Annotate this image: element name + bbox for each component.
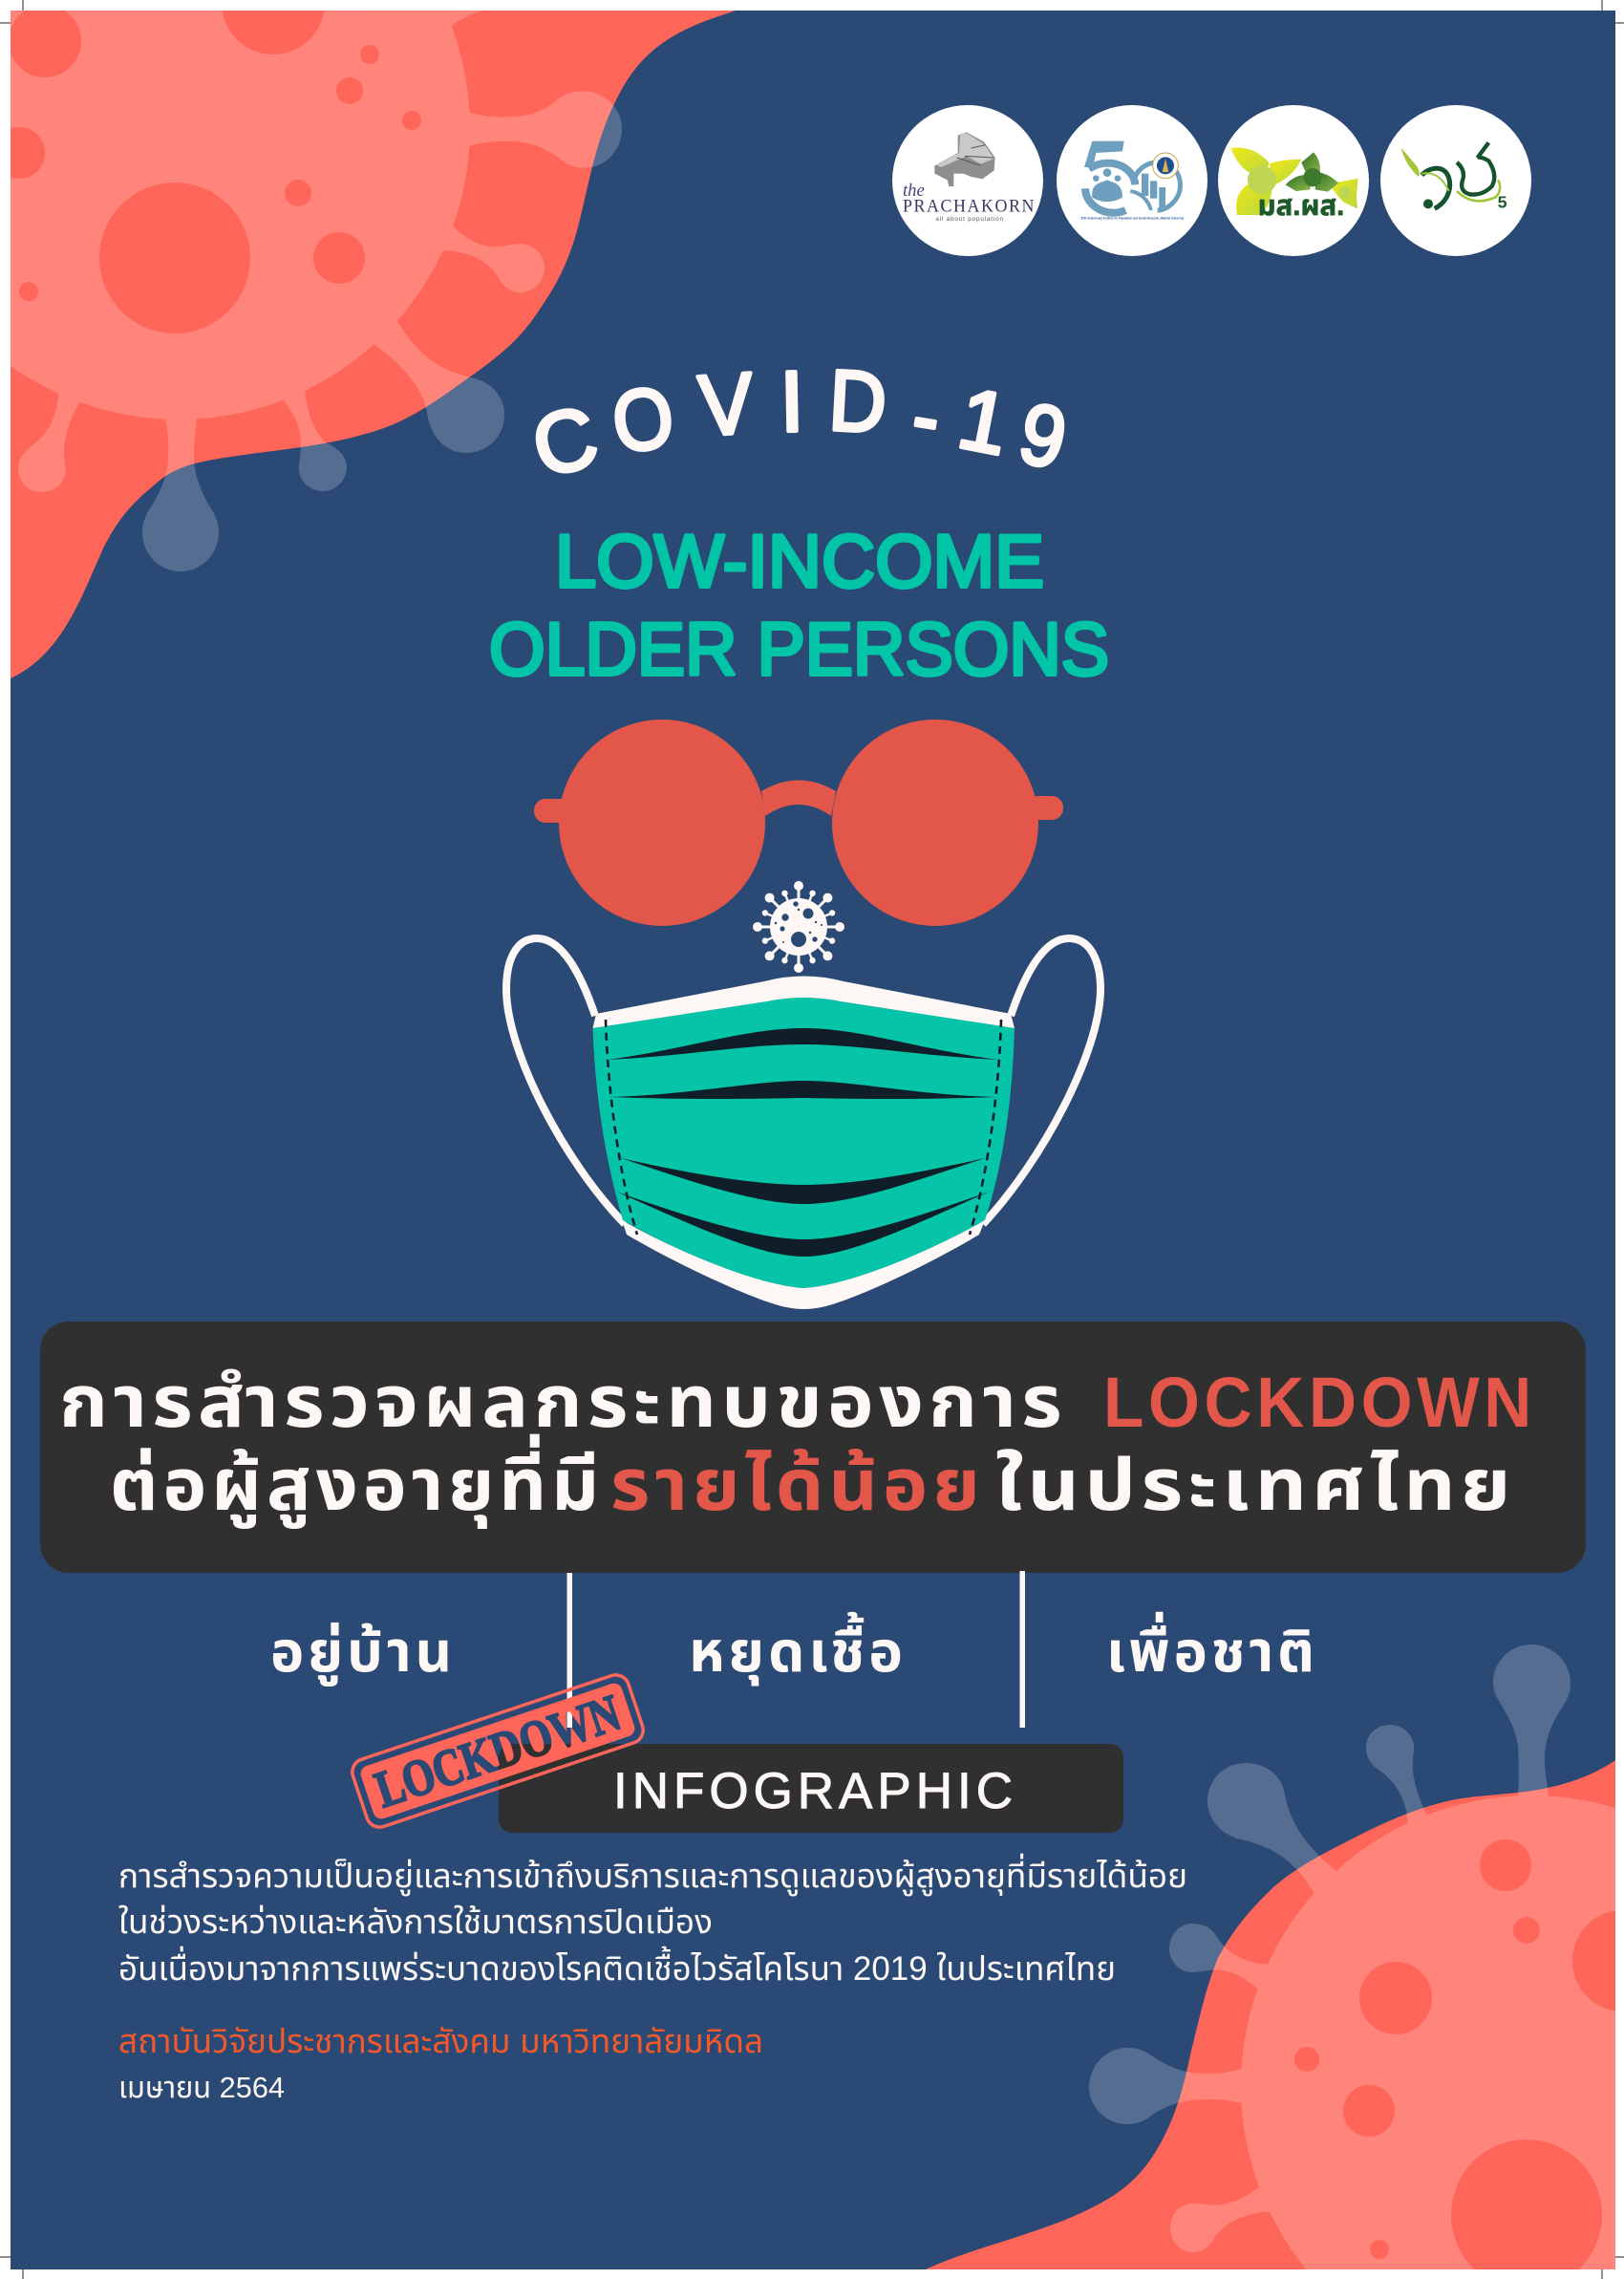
title: COVID-19 arched letters: 9 bbox=[1012, 385, 1075, 487]
icon: grey P building bbox=[934, 132, 995, 186]
main title text bbox=[59, 1362, 1536, 1529]
slogan: หยุดเชื้อ bbox=[689, 1611, 907, 1687]
lockdown stamp bbox=[349, 1671, 647, 1831]
bottom-right virus blob bbox=[926, 1645, 1624, 2279]
tagline: all about population bbox=[935, 216, 1003, 223]
title: COVID-19 arched letters: I bbox=[780, 355, 804, 450]
body description: อันเนื่องมาจากการแพร่ระบาดของโรคติดเชื้อไวรัสโคโรนา 2019 ในประเทศไทย bbox=[118, 1946, 1116, 1988]
main title text: ต่อผู้สูงอายุที่มี bbox=[110, 1434, 604, 1529]
infographic text: INFOGRAPHIC bbox=[613, 1763, 1013, 1819]
panel: main title box bbox=[40, 1322, 1586, 1573]
university seal bbox=[1153, 153, 1178, 179]
top white band bbox=[592, 977, 1015, 1028]
coral blob shape bbox=[11, 11, 736, 678]
mask body bbox=[592, 998, 1015, 1288]
panel: infographic label bbox=[499, 1744, 1123, 1833]
main title text: การสำรวจผลกระทบของการ bbox=[59, 1362, 1067, 1443]
body description bbox=[118, 1853, 1187, 1988]
logo text: มส.ผส. bbox=[1258, 190, 1344, 222]
title: COVID-19 arched letters: D bbox=[826, 353, 888, 451]
title: COVID-19 arched letters: V bbox=[695, 355, 757, 454]
logo: 60 swirl bbox=[1380, 105, 1531, 256]
ring and bars bbox=[1130, 162, 1180, 210]
icon: red round glasses bbox=[534, 720, 1063, 926]
pleats bbox=[608, 1028, 998, 1257]
title: COVID-19 arched letters bbox=[524, 353, 1075, 496]
top-left virus blob bbox=[0, 0, 736, 678]
logo: Prachakorn bbox=[892, 105, 1043, 256]
slogan: อยู่บ้าน bbox=[270, 1620, 456, 1687]
numeral five with people bbox=[1084, 141, 1135, 213]
yellow leaves bbox=[1230, 147, 1358, 215]
title: COVID-19 arched letters: 1 bbox=[951, 371, 1016, 474]
divider lines bbox=[567, 1571, 1025, 1728]
swirl strokes bbox=[1401, 142, 1500, 208]
title: COVID-19 arched letters: O bbox=[608, 369, 679, 471]
title: COVID-19 arched letters: C bbox=[524, 389, 607, 496]
main title text: ในประเทศไทย bbox=[995, 1445, 1516, 1526]
dot bbox=[1423, 199, 1433, 208]
anniversary caption: 50th Anniversary Institute for Population and Social Research, Mahidol University bbox=[1081, 216, 1185, 220]
heading: low-income older persons: OLDER PERSONS bbox=[489, 607, 1109, 691]
logo: 50th anniversary bbox=[1057, 105, 1207, 256]
leaf centres bbox=[1248, 165, 1276, 194]
icon: small white virus bbox=[753, 881, 844, 973]
title: COVID-19 arched letters: - bbox=[907, 368, 947, 466]
virus holes bbox=[0, 0, 421, 333]
virus holes bbox=[1294, 1839, 1624, 2279]
main title text: รายได้น้อย bbox=[610, 1445, 985, 1526]
logo: leaves bbox=[1218, 105, 1369, 256]
virus body and spikes bbox=[0, 0, 622, 571]
green leaves bbox=[1286, 152, 1338, 192]
stitching bbox=[606, 1020, 1001, 1235]
coral blob shape bbox=[926, 1760, 1615, 2269]
wordmark Prachakorn: PRACHAKORN bbox=[903, 197, 1036, 217]
slogan: เพื่อชาติ bbox=[1106, 1611, 1318, 1684]
heading: low-income older persons: LOW-INCOME bbox=[555, 519, 1044, 603]
ear loops bbox=[506, 938, 1100, 1224]
body description: ในช่วงระหว่างและหลังการใช้มาตรการปิดเมือง bbox=[118, 1903, 713, 1941]
icon: surgical mask bbox=[506, 938, 1100, 1309]
slogan bbox=[270, 1611, 1318, 1687]
virus body and spikes bbox=[1089, 1645, 1624, 2279]
institute name: สถาบันวิจัยประชากรและสังคม มหาวิทยาลัยมหิดล bbox=[118, 2023, 763, 2060]
main title text: LOCKDOWN bbox=[1103, 1363, 1536, 1442]
bottom white band bbox=[622, 1220, 985, 1309]
date: เมษายน 2564 bbox=[118, 2071, 285, 2104]
numeral five: 5 bbox=[1498, 192, 1507, 211]
body description: การสำรวจความเป็นอยู่และการเข้าถึงบริการและการดูแลของผู้สูงอายุที่มีรายได้น้อย bbox=[118, 1853, 1187, 1896]
script word the: the bbox=[903, 181, 925, 201]
heading: low-income older persons bbox=[489, 519, 1109, 691]
